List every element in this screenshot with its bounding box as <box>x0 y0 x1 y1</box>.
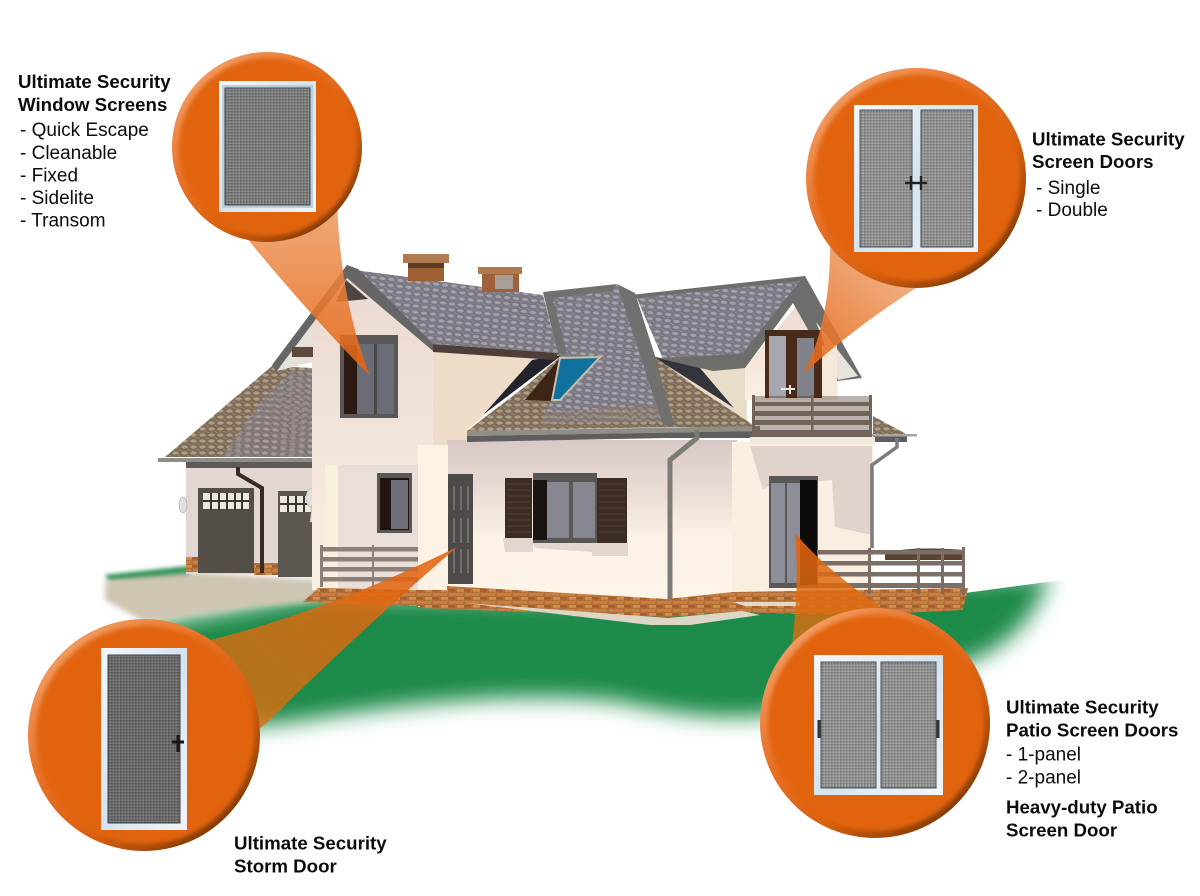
window screen product <box>219 81 316 212</box>
storm door product <box>101 648 187 830</box>
text: window screens: - Transom <box>20 210 106 232</box>
gable vent <box>292 347 313 357</box>
text: window screens: Window Screens <box>18 94 167 115</box>
text: window screens <box>18 71 171 232</box>
text: screen doors: Screen Doors <box>1032 151 1154 172</box>
chimney left <box>403 254 449 281</box>
text: patio doors <box>1006 697 1178 841</box>
text: window screens: Ultimate Security <box>18 71 171 92</box>
double door product <box>854 105 978 252</box>
entry door <box>448 474 473 584</box>
left soffit <box>277 280 345 371</box>
walkway <box>465 603 760 625</box>
text: screen doors: Ultimate Security <box>1032 128 1185 150</box>
terrace rail <box>817 547 965 595</box>
text: window screens: - Cleanable <box>20 143 117 164</box>
dark valley <box>484 355 562 414</box>
porch rail <box>320 545 418 587</box>
text: patio doors: Patio Screen Doors <box>1006 720 1178 741</box>
balcony door <box>765 330 822 398</box>
right walls <box>667 440 737 602</box>
shuttered window <box>505 473 627 543</box>
chimney right <box>478 267 522 292</box>
lower hip roof right <box>655 357 758 428</box>
balcony wall section <box>822 345 837 397</box>
upper window <box>340 335 398 418</box>
lower main wall <box>447 440 667 605</box>
entry steps <box>733 602 800 606</box>
right roof stub <box>870 416 917 442</box>
badge: storm door <box>28 619 260 851</box>
window shadows <box>503 538 628 556</box>
porch recess <box>325 465 418 590</box>
left gable fascia <box>272 265 433 372</box>
central hip roof <box>467 284 677 431</box>
text: window screens: - Quick Escape <box>20 120 149 141</box>
connector cone: window screens <box>228 200 370 376</box>
garage wall <box>158 458 316 575</box>
upper right roof <box>630 276 862 381</box>
text: storm door <box>234 833 387 877</box>
tower column <box>418 445 448 607</box>
balcony slab <box>750 437 875 444</box>
right valley shadow <box>652 356 734 408</box>
text: patio doors: Screen Door <box>1006 820 1117 841</box>
downpipe right <box>872 438 897 548</box>
driveway <box>105 572 330 622</box>
balcony rail <box>752 395 872 437</box>
downpipe front <box>670 430 697 600</box>
text: screen doors <box>1032 128 1185 221</box>
connector cone: patio doors <box>790 533 900 660</box>
gable truss <box>336 280 368 302</box>
porch window <box>377 473 412 533</box>
badge: patio doors <box>760 608 990 838</box>
lawn <box>105 566 1050 732</box>
text: patio doors: - 2-panel <box>1006 768 1081 789</box>
garage doors <box>198 488 312 577</box>
patio door product <box>814 655 943 795</box>
lower roof front dormer skylight <box>525 357 600 401</box>
lower eave <box>467 426 760 442</box>
patio door <box>769 476 818 588</box>
badge: screen doors <box>806 68 1026 288</box>
text: window screens: - Fixed <box>20 166 78 186</box>
text: screen doors: - Single <box>1036 178 1100 199</box>
recess wall under main roof <box>433 345 560 465</box>
central tower wall <box>312 278 433 590</box>
wall lamps <box>179 489 427 525</box>
text: window screens: - Sidelite <box>20 188 94 209</box>
text: patio doors: Ultimate Security <box>1006 697 1159 718</box>
downpipe <box>238 467 262 573</box>
garage roof <box>165 366 312 457</box>
text: storm door: Ultimate Security <box>234 833 387 854</box>
main grey roof <box>355 270 558 353</box>
text: patio doors: Heavy-duty Patio <box>1006 797 1158 818</box>
main roof eave <box>433 344 558 360</box>
connector cone: screen doors <box>803 235 945 374</box>
brick base <box>420 586 968 617</box>
right upper gable wall <box>745 298 838 400</box>
text: screen doors: - Double <box>1036 200 1108 221</box>
text: storm door: Storm Door <box>234 856 337 877</box>
badge: window screen <box>172 52 362 242</box>
house <box>158 254 968 625</box>
connector cone: storm door <box>190 547 457 760</box>
text: patio doors: - 1-panel <box>1006 745 1081 766</box>
right recess wall <box>655 358 747 432</box>
